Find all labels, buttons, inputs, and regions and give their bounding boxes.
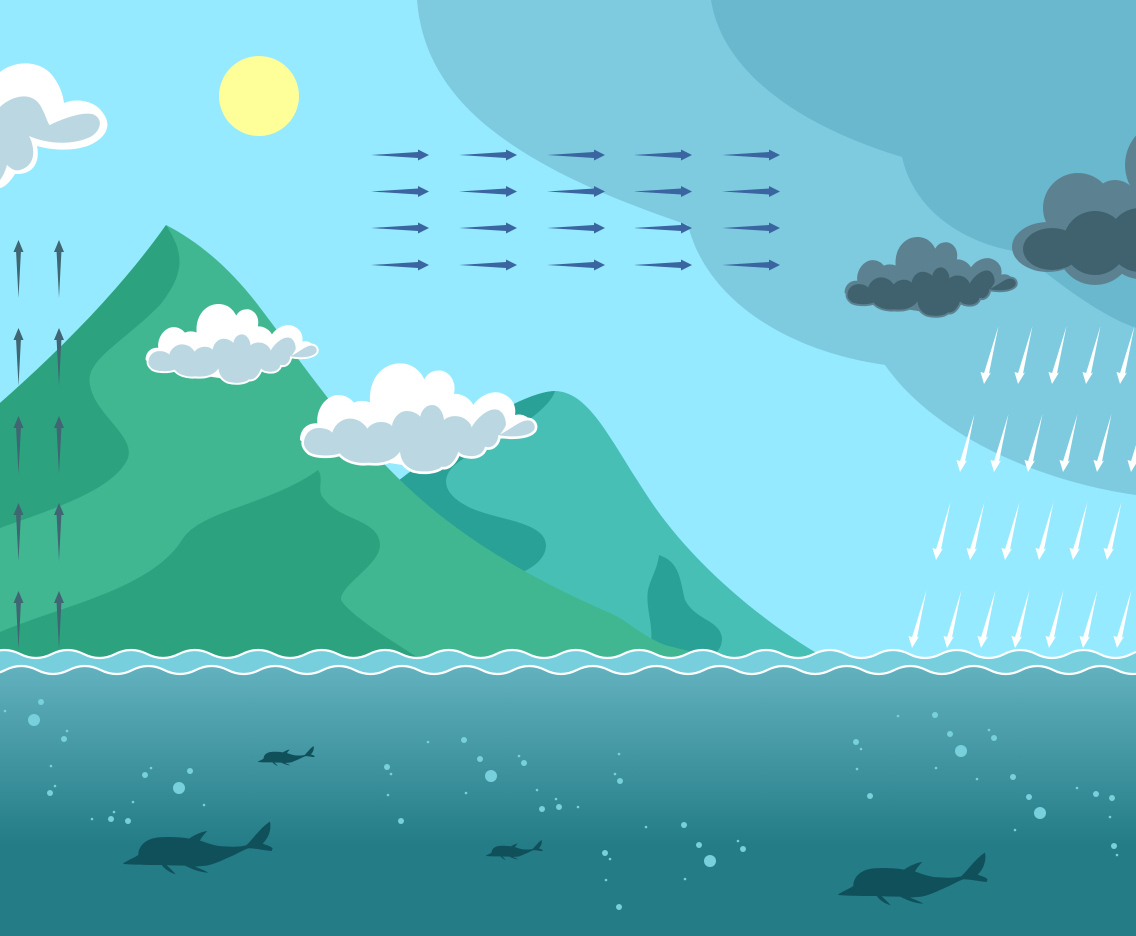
dolphin small center xyxy=(486,840,543,860)
wind arrows grid xyxy=(371,150,780,270)
icon: sun xyxy=(219,56,299,136)
white cloud top left xyxy=(0,63,107,188)
storm cloud small xyxy=(845,237,1016,316)
underwater bubbles xyxy=(4,699,1118,910)
back mountain xyxy=(380,391,832,665)
evaporation arrows xyxy=(14,240,64,649)
dolphin large right xyxy=(838,853,988,905)
front mountain xyxy=(0,225,712,665)
storm sky: outer light cloud layer xyxy=(417,0,1136,495)
storm cloud large xyxy=(1012,120,1136,285)
rain arrows xyxy=(908,326,1136,648)
ocean body xyxy=(0,666,1136,936)
storm sky: inner darker cloud layer xyxy=(711,0,1136,328)
wave lines xyxy=(0,650,1136,674)
white cloud large xyxy=(300,363,535,471)
ocean surface band xyxy=(0,650,1136,700)
dolphin small left xyxy=(258,746,315,766)
dolphin large left xyxy=(123,822,273,874)
white cloud on mountain peak xyxy=(146,304,317,383)
